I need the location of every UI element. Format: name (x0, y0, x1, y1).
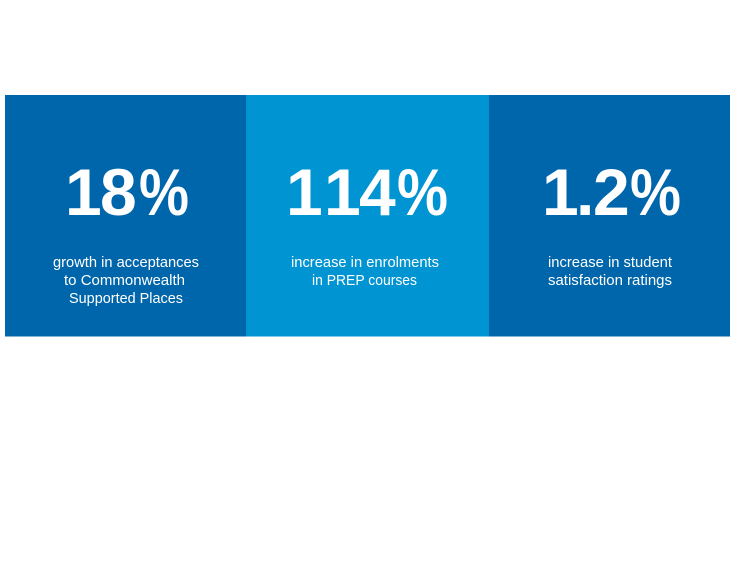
caption: increase in student: satisfaction ratings (548, 273, 672, 289)
caption: increase in student: increase in student (548, 255, 672, 271)
statistic: 18% (65, 155, 189, 229)
statistic: 114%: 114 (286, 155, 396, 229)
caption: increase in student (548, 255, 672, 289)
statistic: 18%: 18 (65, 155, 137, 229)
caption: increase in enrolments: increase in enrolments (291, 255, 439, 271)
caption: growth in acceptances: to Commonwealth (64, 273, 185, 289)
caption: increase in enrolments: in PREP courses (312, 273, 417, 289)
caption: increase in enrolments (291, 255, 439, 289)
caption: growth in acceptances: growth in acceptances (53, 255, 199, 271)
caption: growth in acceptances (53, 255, 199, 307)
panel: student satisfaction (489, 95, 730, 336)
panel: PREP enrolments (246, 95, 489, 336)
caption: growth in acceptances: Supported Places (69, 291, 183, 307)
statistic: 114%: % (397, 155, 448, 229)
statistic: 1.2%: 1.2 (542, 155, 630, 229)
statistic: 1.2% (542, 155, 681, 229)
statistic: 114% (286, 155, 448, 229)
statistic: 18%: % (139, 155, 189, 229)
statistic: 1.2%: % (630, 155, 681, 229)
panel: acceptances growth (5, 95, 246, 336)
